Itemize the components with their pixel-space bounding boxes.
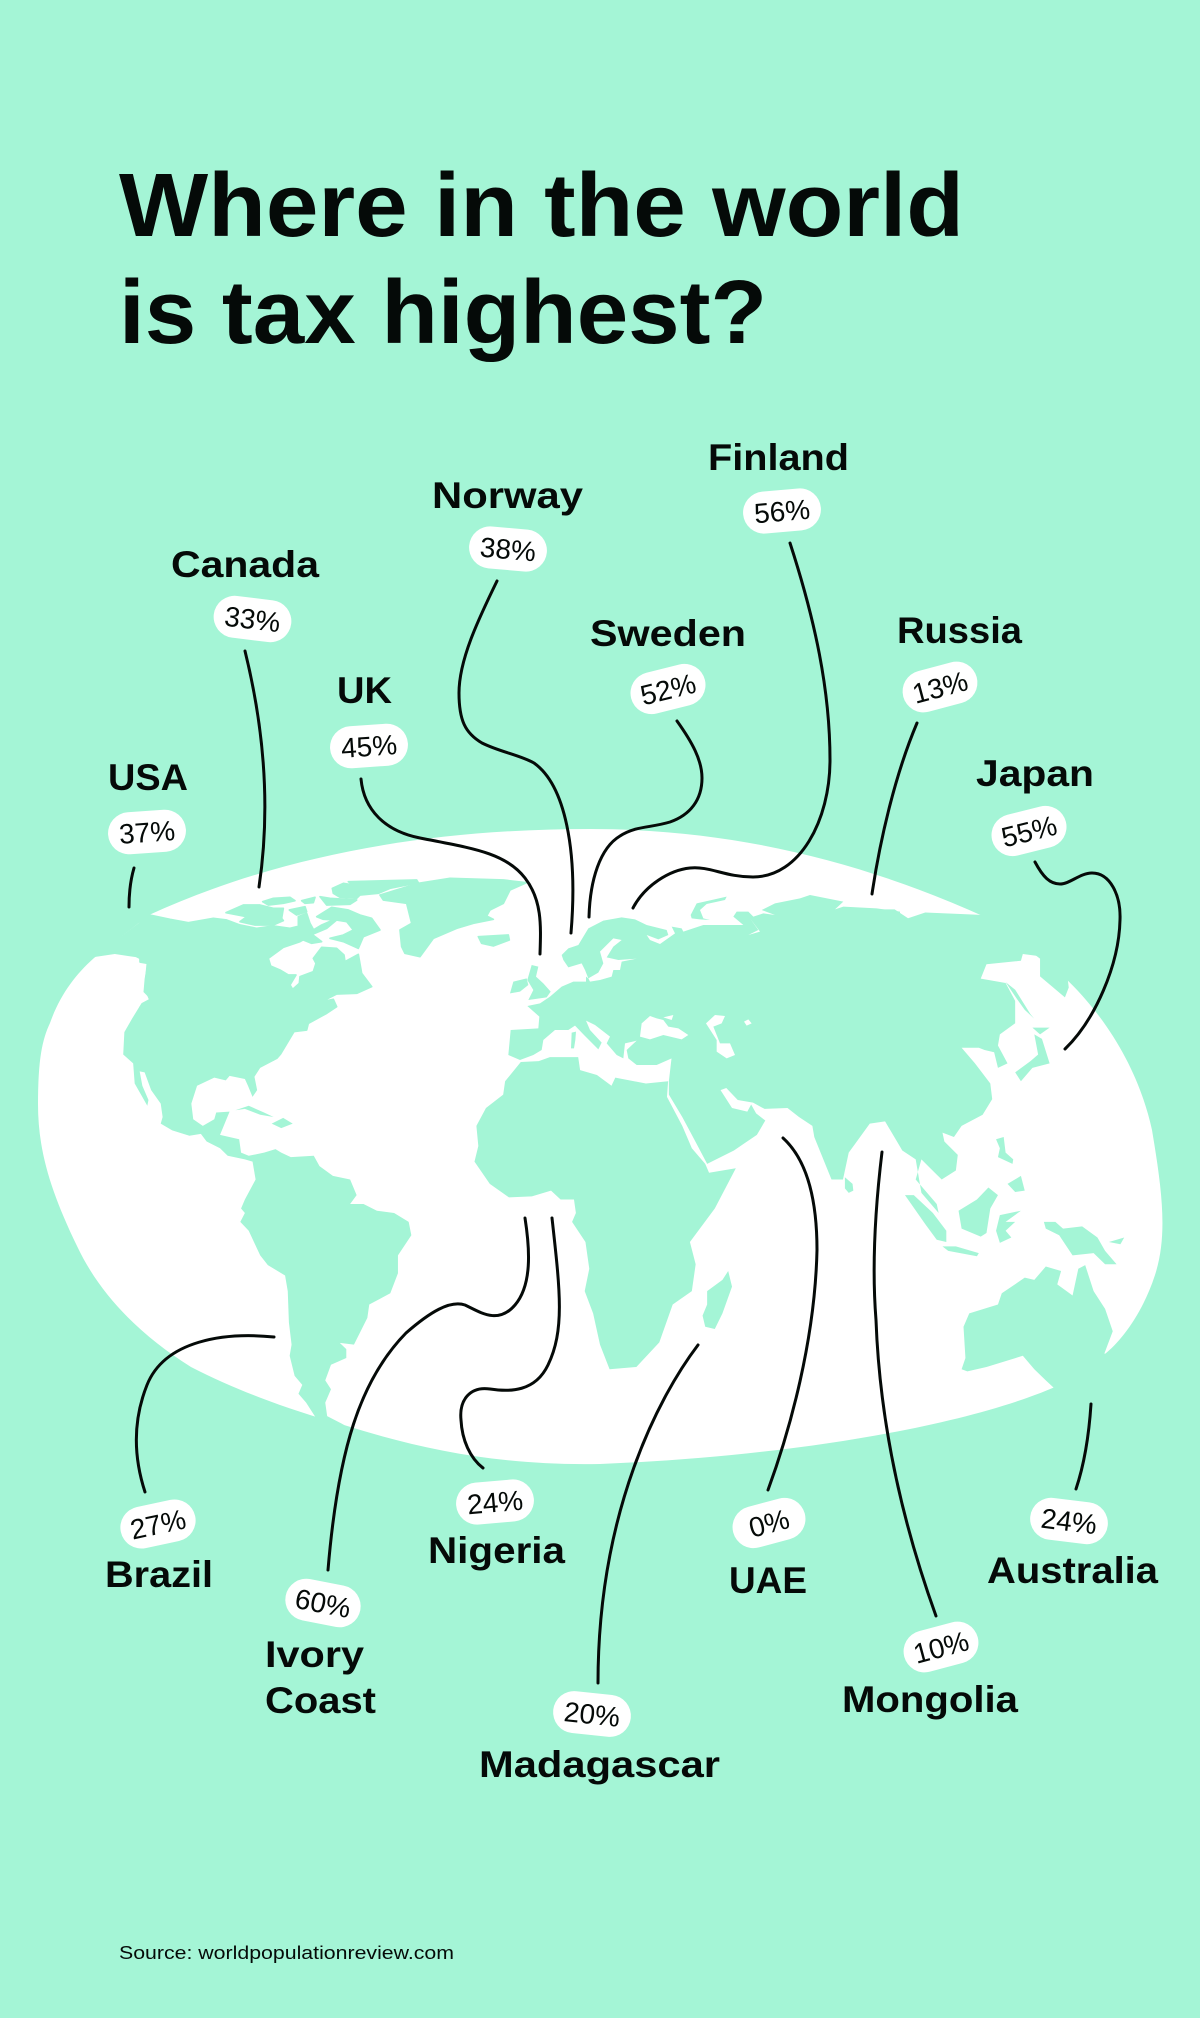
callout: Norway	[432, 475, 583, 933]
callout: Mongolia	[842, 1152, 1018, 1720]
callout: Finland	[633, 437, 849, 908]
pill: 52%	[626, 659, 710, 719]
label: Ivory Coast: Coast	[265, 1680, 376, 1721]
label: UAE: UAE	[729, 1560, 807, 1601]
connector: Ivory Coast	[328, 1218, 529, 1570]
connector: Australia	[1076, 1404, 1091, 1489]
callout: Russia	[872, 610, 1022, 894]
pill: 33%: 33%	[223, 601, 282, 638]
world map	[38, 829, 1162, 1464]
title: is tax highest?	[119, 263, 767, 363]
pill: 60%: 60%	[292, 1583, 353, 1624]
connector: Japan	[1035, 862, 1120, 1049]
pill: 55%	[987, 801, 1071, 861]
label: Mongolia: Mongolia	[842, 1679, 1018, 1720]
callout: UAE	[728, 1138, 817, 1601]
pill: 24%: 24%	[1039, 1503, 1099, 1540]
pill: 13%	[898, 657, 982, 717]
connector: Finland	[633, 543, 830, 908]
land: Canada, arctic islands, Greenland, Iceland	[140, 878, 527, 1060]
pill: 24%	[454, 1478, 536, 1526]
ocean background shape	[38, 829, 1162, 1464]
pill: 20%: 20%	[562, 1696, 621, 1733]
callout: Madagascar	[479, 1345, 720, 1785]
pill: 37%: 37%	[118, 815, 176, 850]
pill: 38%: 38%	[479, 532, 537, 567]
land: Africa, Asia, Indonesia, Australia	[474, 909, 1136, 1403]
label: UK: UK	[337, 670, 392, 711]
label: Madagascar: Madagascar	[479, 1744, 720, 1785]
label: Australia: Australia	[987, 1550, 1158, 1591]
callout: UK	[329, 670, 540, 954]
callout: Nigeria	[428, 1218, 565, 1571]
connector: Nigeria	[461, 1218, 559, 1468]
pill: 45%: 45%	[340, 729, 398, 764]
label: Japan: Japan	[976, 753, 1094, 794]
label: Brazil: Brazil	[105, 1554, 213, 1595]
title: Where in the world	[119, 156, 964, 256]
pill: 10%: 10%	[910, 1625, 972, 1670]
pill: 55%: 55%	[998, 810, 1060, 853]
pill: 13%: 13%	[909, 665, 971, 710]
label: Nigeria: Nigeria	[428, 1530, 565, 1571]
connector: Russia	[872, 723, 917, 894]
land: Europe and northern Russia	[508, 895, 900, 1080]
callout: Sweden	[589, 613, 746, 917]
land: the Americas	[94, 915, 411, 1425]
pill: 0%: 0%	[746, 1503, 793, 1544]
connector: USA	[129, 868, 134, 907]
pill: 20%	[551, 1689, 633, 1739]
callout: Japan	[976, 753, 1120, 1049]
callout: USA	[107, 757, 188, 907]
pill: 56%	[741, 487, 823, 535]
connector: UK	[361, 779, 540, 954]
pill: 33%	[211, 593, 294, 645]
inland seas: Baltic, Black Sea, Caspian, Aral, Ob	[588, 918, 760, 1058]
label: Russia: Russia	[897, 610, 1022, 651]
connector: Mongolia	[874, 1152, 936, 1616]
pill: 27%	[116, 1496, 200, 1552]
connector: Sweden	[589, 721, 702, 917]
pill: 27%: 27%	[127, 1504, 189, 1545]
callout: Brazil	[105, 1336, 274, 1595]
pill: 56%: 56%	[753, 494, 811, 529]
label: Sweden: Sweden	[590, 613, 746, 654]
callout: Australia	[987, 1404, 1158, 1591]
title	[119, 156, 964, 363]
callout: Canada	[171, 544, 319, 887]
pill: 24%	[1028, 1495, 1110, 1547]
pill: 37%	[107, 808, 187, 856]
label: Ivory Coast: Ivory	[265, 1634, 364, 1675]
label: Norway: Norway	[432, 475, 583, 516]
connector: Brazil	[136, 1336, 274, 1492]
pill: 45%	[329, 722, 409, 770]
pill: 10%	[899, 1617, 983, 1677]
pill: 24%: 24%	[466, 1485, 524, 1520]
pill: 52%: 52%	[637, 668, 699, 711]
source note: Source: worldpopulationreview.com	[119, 1943, 454, 1963]
pill: 38%	[467, 525, 549, 573]
connector: Canada	[245, 651, 265, 887]
pill: 60%	[282, 1575, 364, 1631]
connector: UAE	[768, 1138, 817, 1490]
connector: Madagascar	[598, 1345, 698, 1683]
label: Finland: Finland	[708, 437, 849, 478]
label: USA: USA	[108, 757, 188, 798]
callout: Ivory Coast	[265, 1218, 529, 1721]
pill: 0%	[728, 1493, 810, 1553]
connector: Norway	[459, 581, 573, 933]
label: Canada: Canada	[171, 544, 319, 585]
